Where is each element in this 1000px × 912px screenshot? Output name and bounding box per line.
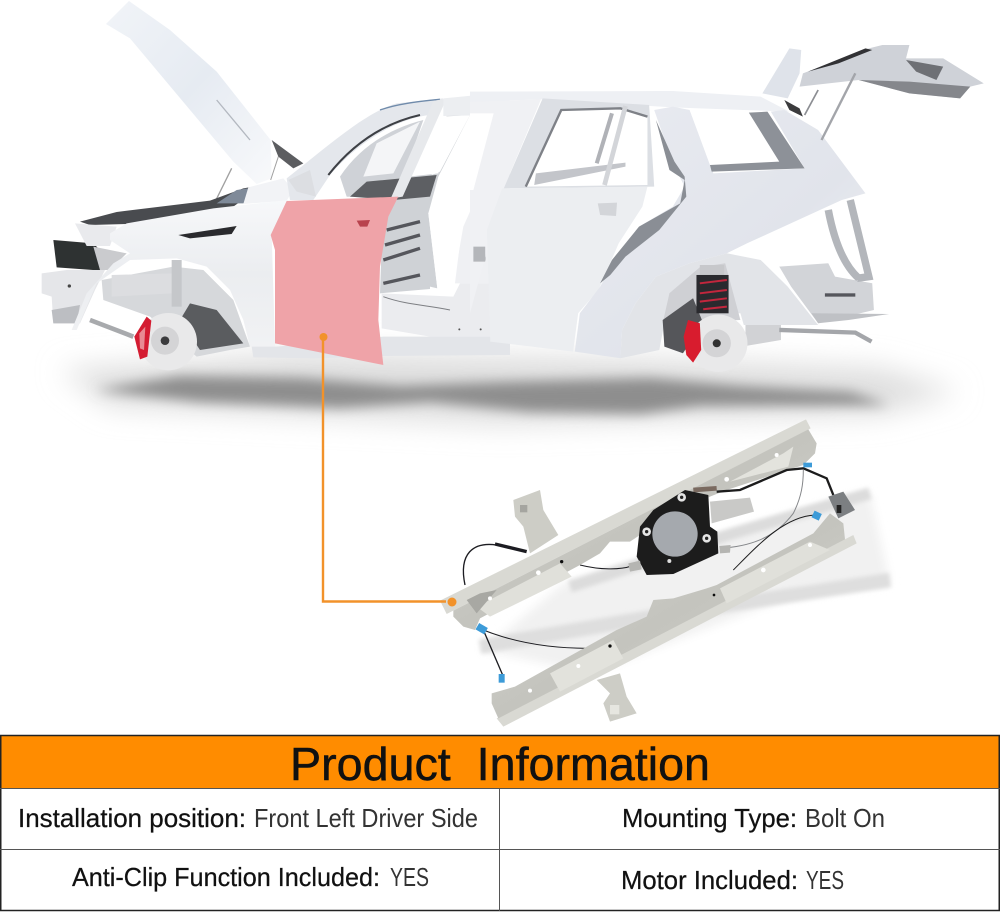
front bumper (42, 270, 105, 323)
rear door frame and window (504, 98, 654, 188)
cell: motor included: YES (806, 865, 844, 895)
lower rail (492, 513, 857, 727)
headlight and grille (53, 223, 127, 271)
roof (470, 91, 789, 313)
door highlight (271, 197, 398, 365)
cell: anti-clip function: YES (390, 862, 429, 892)
hood raised (106, 1, 303, 207)
floor and sill (252, 283, 510, 358)
wire harness and connector (693, 468, 855, 570)
front wheel well (90, 260, 250, 357)
front fender (72, 200, 288, 347)
cell: mounting type (622, 803, 885, 833)
cell: mounting type: Mounting Type: (622, 803, 797, 833)
lower bracket (597, 673, 637, 722)
product information table (0, 736, 1000, 911)
rear inner wheel arch (620, 253, 818, 358)
trunk floor (779, 263, 889, 323)
tailgate frame lower (828, 200, 869, 278)
regulator shadow (480, 493, 890, 673)
car body front half (42, 1, 510, 370)
door handle (357, 220, 370, 227)
C pillar and rear quarter panel (575, 107, 865, 358)
upper rail (440, 419, 817, 630)
inner door panel (347, 115, 470, 293)
roof rail front (443, 92, 510, 116)
car body rear half (470, 45, 984, 372)
cell: anti-clip function: Anti-Clip Function Included: (72, 862, 380, 892)
rear spring (696, 265, 729, 313)
cell: installation position: Installation position: (18, 803, 246, 833)
blue cable clips (476, 463, 822, 683)
rear door open (473, 187, 647, 352)
cell: installation position: Front Left Driver Side (254, 803, 478, 833)
left cable (463, 544, 632, 675)
front brake disc (134, 313, 197, 370)
table title: Product Information (290, 738, 710, 790)
exhaust (745, 325, 872, 346)
motor housing (628, 490, 754, 575)
car ground shadow (60, 352, 960, 424)
orange leader line (320, 333, 456, 606)
rear tailgate raised (762, 45, 984, 140)
rear brake disc (684, 315, 747, 372)
B pillar (428, 102, 510, 293)
front door window frame (391, 98, 447, 199)
table grid lines (0, 736, 1000, 911)
A pillar and windshield frame (287, 98, 443, 200)
engine bay (80, 178, 293, 225)
cell: motor included: Motor Included: (621, 865, 798, 895)
cell: mounting type: Bolt On (805, 803, 885, 833)
side mirror (288, 170, 316, 197)
table header bar (0, 736, 1000, 790)
upper bracket (513, 490, 558, 553)
cell: installation position (18, 803, 478, 833)
window regulator (440, 419, 857, 727)
